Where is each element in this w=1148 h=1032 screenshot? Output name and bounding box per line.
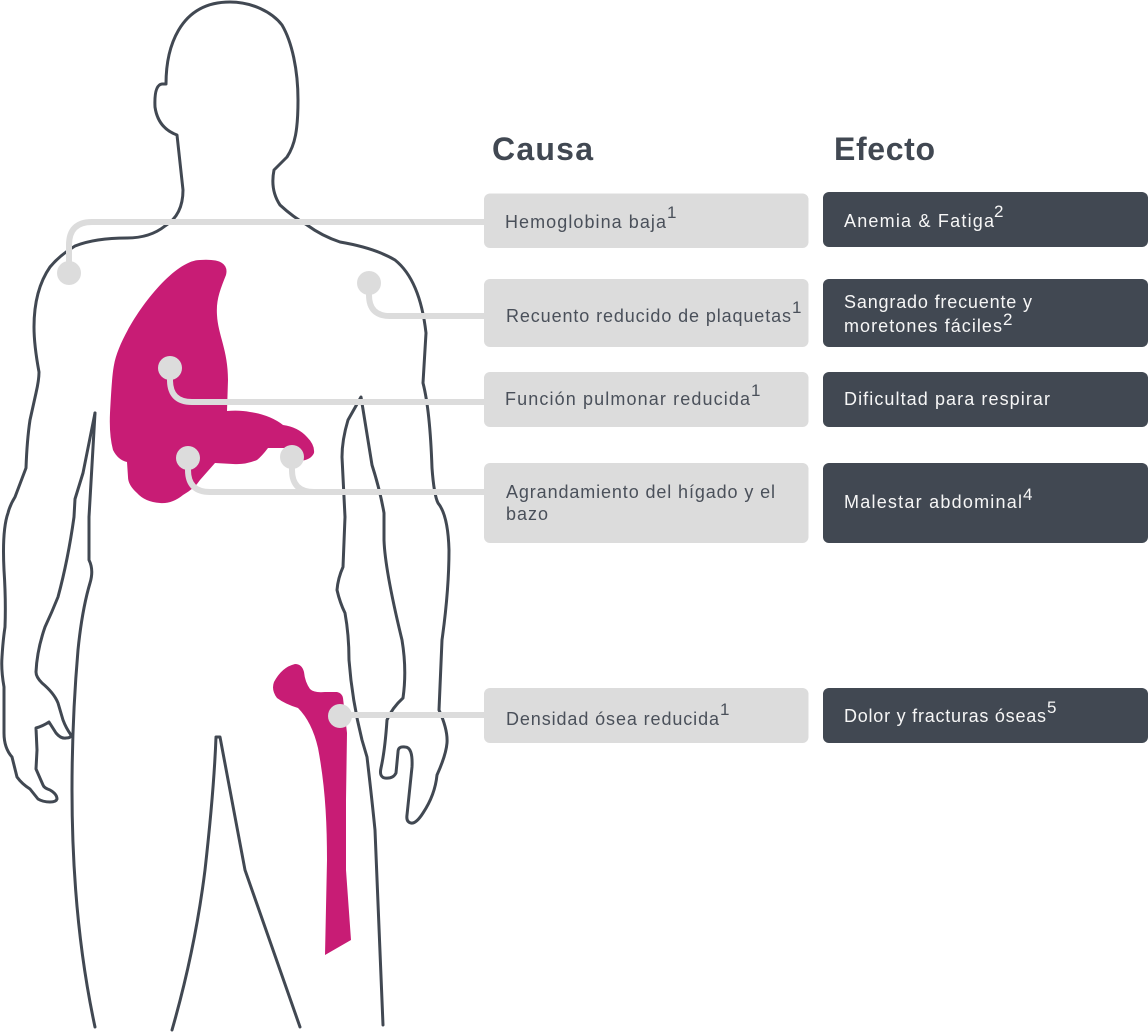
effect: Anemia y Fatiga [823,192,1148,247]
cause: Densidad ósea reducida [484,688,808,743]
effect: Anemia y Fatiga: Anemia & Fatiga [844,211,995,231]
cause: Agrandamiento del hígado y el bazo [484,463,808,543]
effect: Dificultad para respirar [823,372,1148,427]
effect: Dolor y fracturas óseas [823,688,1148,743]
cause: Función pulmonar reducida: 1 [751,381,760,400]
cause: Hemoglobina baja [484,194,808,248]
cause: Hemoglobina baja: 1 [667,203,676,222]
cause: Agrandamiento del hígado y el bazo: bazo [506,504,548,524]
cause: Función pulmonar reducida [484,372,808,427]
effect: Dificultad para respirar: Dificultad para respirar [844,389,1050,409]
effect: Malestar abdominal: Malestar abdominal [844,492,1022,512]
cause: Recuento reducido de plaquetas: Recuento reducido de plaquetas [506,306,791,326]
heading: Causa: Causa [492,131,593,167]
organ: lungs, liver and spleen [110,260,314,503]
connectors from body points to cause boxes [57,222,484,728]
effect: Dolor y fracturas óseas: Dolor y fracturas óseas [844,706,1046,726]
cause: Función pulmonar reducida: Función pulmonar reducida [505,389,751,409]
effect: Anemia y Fatiga: 2 [994,202,1003,221]
effect: Sangrado frecuente y moretones fáciles: Sangrado frecuente y [844,292,1032,312]
effect: Dolor y fracturas óseas: 5 [1047,698,1056,717]
cause: Recuento reducido de plaquetas [484,279,808,347]
cause: Densidad ósea reducida: Densidad ósea reducida [506,709,720,729]
cause: Recuento reducido de plaquetas: 1 [792,298,801,317]
organ: femur bone [273,664,351,955]
heading: Efecto: Efecto [834,131,935,167]
effect: Sangrado frecuente y moretones fáciles: 2 [1003,310,1012,329]
cause: Hemoglobina baja: Hemoglobina baja [505,212,667,232]
effect: Sangrado frecuente y moretones fáciles [823,279,1148,347]
effect: Malestar abdominal [823,463,1148,543]
effect: Malestar abdominal: 4 [1023,485,1032,504]
illustration: human body with highlighted organs [2,2,449,1030]
cause: Agrandamiento del hígado y el bazo: Agrandamiento del hígado y el [506,482,775,502]
body outline [2,2,449,1030]
cause: Densidad ósea reducida: 1 [720,700,729,719]
effect: Sangrado frecuente y moretones fáciles: moretones fáciles [844,316,1002,336]
